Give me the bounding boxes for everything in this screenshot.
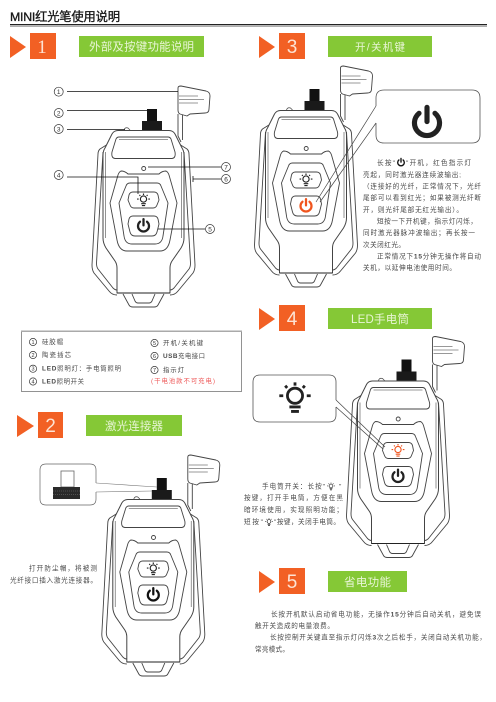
heading: section 4 xyxy=(259,305,432,331)
panel: legend: LED照明开关 xyxy=(42,376,85,386)
icon: bulb xyxy=(147,563,160,575)
device diagram with callouts: 6 xyxy=(224,176,228,183)
text: flashlight instructions: 短按" xyxy=(244,517,264,526)
text: power key instructions: 亮起，同时激光器连续波输出; xyxy=(363,170,461,179)
text: flashlight instructions xyxy=(244,482,343,526)
panel: section 5 power saving xyxy=(255,568,486,654)
icon: bulb xyxy=(300,174,312,186)
text: power key instructions: 长按" xyxy=(377,158,396,167)
device diagram with callouts xyxy=(54,86,231,307)
text: flashlight instructions: 暗环境使用，实现照明功能； xyxy=(244,505,343,514)
panel: legend: 4 xyxy=(31,380,35,386)
panel: legend: 3 xyxy=(31,367,35,373)
heading: section 1 xyxy=(10,33,204,59)
heading: section 3 xyxy=(259,33,432,59)
text: power key instructions: 正常情况下15分钟无操作将自动 xyxy=(377,252,481,260)
panel: legend: USB充电接口 xyxy=(163,351,205,360)
text: power key instructions xyxy=(363,158,481,272)
text: power key instructions: （连接好的光纤，正常情况下，光纤 xyxy=(363,182,481,190)
text: power saving instructions: 常亮模式。 xyxy=(255,644,289,654)
device diagram xyxy=(254,66,372,287)
panel: legend xyxy=(21,330,242,392)
panel: legend: LED照明灯：手电筒照明 xyxy=(42,364,121,373)
panel: legend: 1 xyxy=(31,340,35,346)
panel: legend: 7 xyxy=(153,368,156,374)
callout: bulb key xyxy=(253,375,385,449)
device diagram with callouts: 7 xyxy=(224,164,228,171)
heading: section 3: 3 xyxy=(287,37,297,58)
device diagram with callouts: 5 xyxy=(208,226,212,233)
device diagram with callouts: 1 xyxy=(57,89,61,96)
text: flashlight instructions: 手电筒开关：长按" xyxy=(262,482,326,490)
device diagram xyxy=(102,455,220,676)
text: power key instructions: 关机，以延伸电池使用时间。 xyxy=(363,263,456,272)
panel: section 3 power key xyxy=(254,33,481,287)
heading: section 2: 2 xyxy=(45,416,56,437)
text: connector instructions xyxy=(10,564,97,584)
icon: large power xyxy=(414,107,440,136)
callout: connector close-up xyxy=(40,464,157,505)
text: connector instructions: 打开防尘帽，将被测 xyxy=(29,564,97,572)
text: flashlight instructions: "按键，关闭手电筒。 xyxy=(274,517,340,526)
icon: power xyxy=(138,219,149,231)
panel: legend: 陶瓷插芯 xyxy=(42,350,72,359)
heading: section 5: 5 xyxy=(287,572,297,593)
heading: section 5 xyxy=(259,568,407,594)
text: power key instructions: 短按一下开机键，指示灯闪烁， xyxy=(377,216,477,226)
text: power saving instructions: 触开关造成的电量浪费。 xyxy=(255,621,334,630)
heading: section 2 xyxy=(17,412,182,438)
callout: power key xyxy=(316,90,480,202)
panel: legend: 5 xyxy=(153,341,156,347)
text: flashlight instructions: " xyxy=(339,484,342,490)
text: flashlight instructions: 按键，打开手电筒，方便在黑 xyxy=(244,493,343,502)
heading: section 4: LED手电筒 xyxy=(351,312,409,326)
device diagram with callouts: 2 xyxy=(57,110,61,117)
panel: legend: 开机/关机键 xyxy=(163,338,204,347)
panel: legend: 指示灯 xyxy=(163,365,185,374)
text: power key instructions: "开机，红色指示灯 xyxy=(406,158,471,167)
device diagram with callouts: 3 xyxy=(57,126,61,133)
heading: section 1: 外部及按键功能说明 xyxy=(89,40,194,54)
icon: bulb xyxy=(137,194,150,206)
text: power key instructions: 尾部可以看到红光；如果被测光纤断 xyxy=(363,193,481,202)
panel: legend: 6 xyxy=(153,354,156,360)
icon: power xyxy=(148,588,159,600)
text: power saving instructions: 长按控制开关键直至指示灯闪烁3次之后松手，关闭自动关机功能， xyxy=(270,632,486,642)
device diagram xyxy=(346,336,464,558)
panel: section 2 laser connector xyxy=(10,412,220,676)
icon: power xyxy=(392,470,404,482)
text: power saving instructions xyxy=(255,610,486,654)
text: power key instructions: 同时激光器脉冲波输出；再长按一 xyxy=(363,228,475,237)
heading: section 1: 1 xyxy=(37,37,47,58)
heading: section 3: 开/关机键 xyxy=(355,40,406,54)
heading: section 5: 省电功能 xyxy=(344,575,392,589)
panel: section 4 LED flashlight xyxy=(244,305,464,558)
text: connector instructions: 光纤接口插入激光连接器。 xyxy=(10,576,97,584)
text: power key instructions: 开，则光纤尾部无红光输出）。 xyxy=(363,205,463,214)
panel: legend: 2 xyxy=(31,353,35,359)
text: power saving instructions: 长按开机默认启动省电功能，无操作15分钟后自动关机，避免误 xyxy=(271,610,481,618)
heading: section 2: 激光连接器 xyxy=(105,419,164,433)
icon: large bulb xyxy=(279,382,311,411)
text: power key instructions: 次关闭红光。 xyxy=(363,240,405,249)
device diagram with callouts: 4 xyxy=(57,172,61,179)
title: MINI红光笔使用说明 xyxy=(10,9,120,24)
panel: legend: 硅胶帽 xyxy=(42,337,63,346)
heading: section 4: 4 xyxy=(287,309,298,330)
panel: legend: (干电池款不可充电) xyxy=(151,376,215,385)
icon: bulb highlighted xyxy=(392,444,404,456)
icon: power highlighted xyxy=(300,199,312,211)
panel: section 1 exterior and keys xyxy=(10,33,230,307)
